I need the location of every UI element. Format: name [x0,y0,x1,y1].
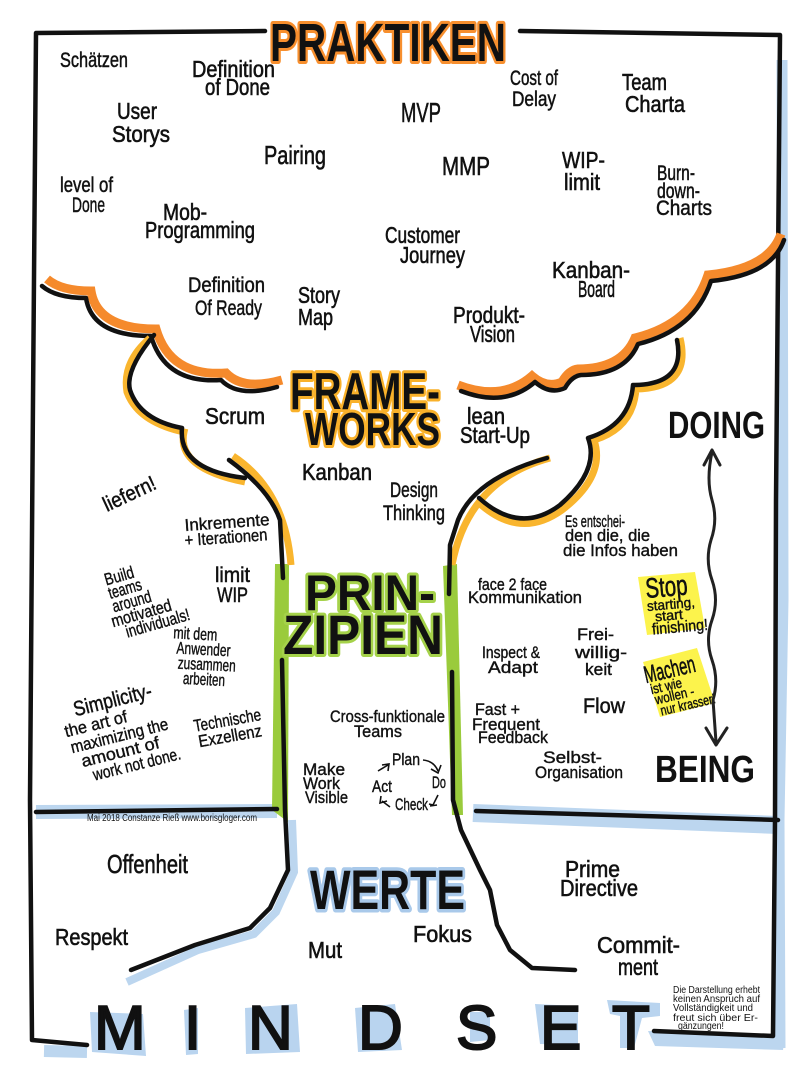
principle labels: right of trunk: Frei- [577,625,614,644]
value labels: Prime [565,856,620,882]
practice labels: MVP [401,97,441,128]
practice labels: Schätzen [60,49,128,72]
sticky note: Machen: Machen [641,651,698,689]
principle labels: left of trunk: Inkremente [184,510,270,535]
principle labels: right of trunk: Kommunikation [468,588,582,607]
practice labels: Mob- [163,199,207,225]
principle labels: right of trunk: Frequent [472,715,540,734]
framework labels: Design [390,479,438,502]
practice labels: Produkt- [453,302,525,328]
principle labels: centre of trunk: Teams [354,722,402,741]
practice labels: of Done [205,74,270,100]
practice labels: Cost of [510,67,558,90]
principle labels: left of trunk: Simplicity- [71,680,154,721]
principle labels: left of trunk: the art of [63,707,129,741]
title: Frameworks: FRAME- [290,363,440,421]
practice labels: Charta [625,91,685,117]
principle labels: right of trunk: face 2 face [478,575,547,594]
practice labels: Delay [512,88,556,111]
framework labels [205,403,530,525]
sticky note: Stop starting: starting, [646,594,696,614]
sticky note: Stop starting: start [654,606,684,624]
arrow: doing to being [704,450,727,745]
disclaimer note: gänzungen! [678,1021,724,1032]
principle labels: left of trunk: motivated [109,596,174,631]
principle labels: right of trunk: Feedback [478,728,548,747]
PDCA cycle: Do [432,773,446,792]
title: Prinzipien: PRIN- [305,565,435,621]
principle labels: left of trunk: teams [106,575,144,603]
practice labels: Map [298,304,333,330]
disclaimer note: freut sich über Er- [673,1013,758,1024]
principle labels: centre of trunk: Make [303,760,345,779]
tree crown: frameworks (yellow and black scallops) [126,335,682,970]
practice labels: Definition [188,274,265,297]
value labels [55,849,680,980]
practice labels: down- [657,180,700,203]
title: Frameworks: WORKS [305,403,440,455]
practice labels: Of Ready [195,297,262,320]
principle labels: right of trunk: Selbst- [543,748,602,767]
practice labels: User [117,98,157,124]
value labels: Fokus [413,921,472,947]
practice labels: Team [622,69,667,95]
practice labels: Programming [145,217,255,243]
practice labels: Storys [112,121,170,147]
value labels: Directive [560,875,638,901]
principle labels: left of trunk: around [110,587,154,616]
value labels: Commit- [597,932,680,958]
practice labels: Customer [385,222,460,248]
practice labels: Definition [192,56,275,82]
principle labels: left of trunk: work not done. [90,744,183,785]
principle labels: right of trunk: die Infos haben [563,541,678,560]
sticky note: Stop starting: finishing! [651,617,709,639]
title: Prinzipien: ZIPIEN [283,603,443,666]
principle labels: left of trunk: Build [102,563,136,589]
principle labels: left of trunk: zusammen [177,654,236,676]
title: Mindset: MINDSET [94,994,650,1063]
principle labels: left of trunk: arbeiten [183,669,225,690]
PDCA cycle [372,750,446,814]
framework labels: Thinking [383,502,445,525]
framework labels: Start-Up [460,422,530,448]
sticky note: Machen: nur krasser! [659,690,717,718]
principle labels: right of trunk: Organisation [535,763,623,782]
label: Doing: DOING [668,405,765,447]
sticky note: Machen: wollen - [652,683,696,708]
principle labels: right of trunk: keit [585,660,612,679]
practice labels: Journey [400,242,465,268]
principle labels: centre of trunk: Visible [305,788,348,807]
framework labels: Kanban [302,459,372,485]
practice labels [60,49,712,347]
sticky note: Stop starting: Stop [644,569,689,604]
value labels: Mut [308,937,343,963]
practice labels: Pairing [264,140,326,170]
principle labels: left of trunk: limit [215,564,250,587]
principle labels: centre of trunk [303,707,445,807]
value labels: Respekt [55,924,129,950]
practice labels: Burn- [657,162,695,185]
title: Frameworks [290,363,440,455]
sticky note: Machen [641,648,717,720]
sticky note: Stop starting [638,568,709,639]
practice labels: MMP [442,151,490,181]
principle labels: left of trunk: Technische [192,705,262,736]
practice labels: Story [298,282,340,308]
practice labels: level of [60,174,113,197]
practice labels: Charts [656,197,712,220]
principle labels: left of trunk: maximizing the [69,715,170,757]
framework labels: Scrum [205,403,265,429]
principle labels: left of trunk: + Iterationen [184,525,268,550]
principle labels: right of trunk: Flow [583,695,626,718]
principle labels: right of trunk: Inspect & [482,643,541,662]
tree crown: practices (orange and black scallops) [42,234,784,398]
trunk: green marker bands [272,564,463,822]
disclaimer note: Vollständigkeit und [673,1003,753,1014]
title: Werte: WERTE [310,858,465,921]
principle labels: left of trunk: mit dem [173,623,218,645]
practice labels: Vision [470,321,515,347]
principle labels: centre of trunk: Cross-funktionale [330,707,445,726]
sticky note: Machen: ist wie [649,674,684,697]
title: Praktiken: PRAKTIKEN [270,13,506,73]
principle labels: left of trunk: individuals! [123,605,192,642]
disclaimer note: Die Darstellung erhebt [673,985,760,996]
PDCA cycle: Act [372,777,392,796]
principle labels: right of trunk: Fast + [475,700,520,719]
principle labels: left of trunk: WIP [217,584,248,607]
value labels: ment [618,954,658,980]
principle labels: right of trunk: willig- [574,643,627,662]
attribution: Mai 2018 Constanze Rieß www.borisgloger.com [87,813,257,824]
label: Being: BEING [655,749,755,791]
principle labels: right of trunk: den die, die [565,526,650,545]
principle labels: left of trunk: amount of [79,733,162,771]
value labels: Offenheit [107,849,189,879]
practice labels: Done [72,194,105,217]
principle labels: left of trunk [57,472,270,789]
PDCA cycle: Check [395,795,428,814]
principle labels: right of trunk: Adapt [488,658,538,677]
practice labels: Board [578,276,615,302]
principle labels: right of trunk [468,512,678,782]
principle labels: left of trunk: Anwender [176,639,231,660]
principle labels: centre of trunk: Work [303,774,340,793]
disclaimer note [673,985,760,1032]
principle labels: left of trunk: liefern! [99,472,160,517]
disclaimer note: keinen Anspruch auf [673,994,760,1005]
principle labels: right of trunk: Es entschei- [565,512,625,531]
PDCA cycle: Plan [392,750,420,769]
practice labels: limit [564,169,601,195]
principle labels: left of trunk: Exzellenz [197,721,263,751]
framework labels: lean [467,403,505,429]
practice labels: Kanban- [552,257,630,283]
title: Prinzipien [283,565,443,666]
practice labels: WIP- [562,147,605,173]
